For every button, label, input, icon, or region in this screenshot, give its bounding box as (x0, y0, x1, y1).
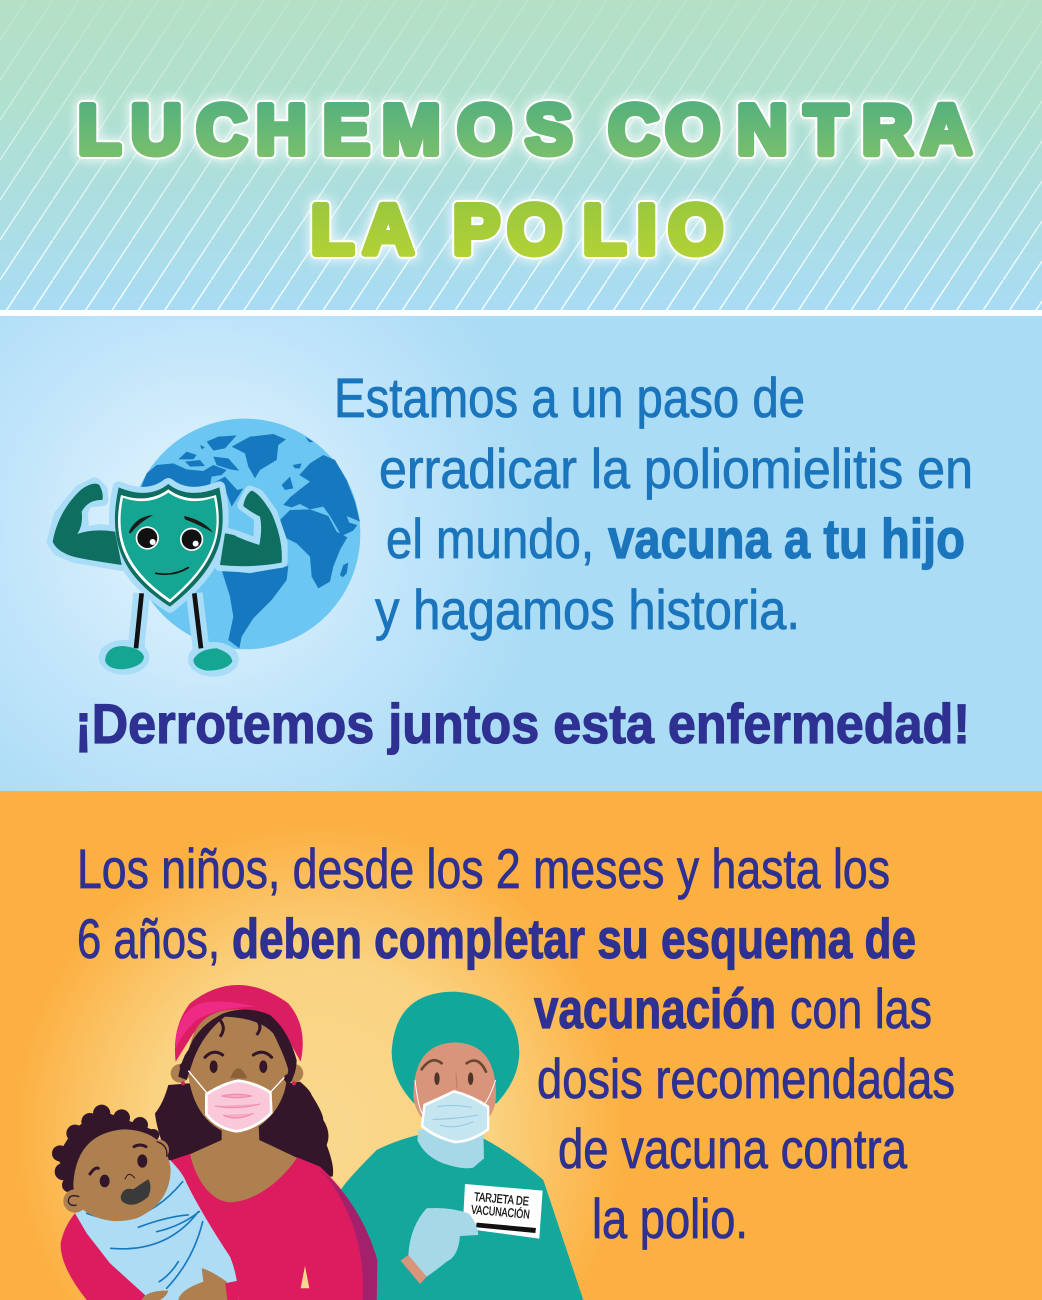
title: LUCHEMOS CONTRA (78, 90, 972, 168)
panel: eradication message (0, 316, 1042, 791)
nurse collar (417, 1130, 484, 1168)
mother hands (142, 1268, 238, 1300)
icon: mascot arms (53, 484, 282, 566)
vaccination card: VACUNACIÓN (471, 1202, 530, 1222)
gloved hand (401, 1208, 478, 1284)
mother neck and chest (188, 1117, 298, 1203)
text block: eradication message: erradicar la poliomielitis en (379, 437, 973, 500)
illustration: mother and baby (52, 985, 377, 1300)
vaccination card: TARJETA DE (473, 1190, 529, 1208)
heading: call to action: ¡Derrotemos juntos esta enfermedad! (75, 692, 970, 755)
mother head (171, 1009, 303, 1137)
title: LA POLIO (311, 190, 723, 268)
baby head (52, 1105, 171, 1221)
title: LA POLIO (311, 190, 723, 268)
title: LUCHEMOS CONTRA (78, 90, 972, 168)
text block: eradication message: el mundo, (386, 507, 594, 570)
icon: mascot legs (136, 593, 201, 648)
text block: vaccination schedule (77, 837, 955, 1250)
nurse gown (330, 1135, 583, 1300)
title (78, 90, 972, 268)
text block: vaccination schedule: vacunación (534, 977, 776, 1040)
vaccination card (463, 1184, 543, 1239)
nurse cap (392, 992, 519, 1103)
mother headband (175, 985, 303, 1062)
text block: eradication message: y hagamos historia. (375, 578, 800, 641)
text block: vaccination schedule: dosis recomendadas (537, 1047, 955, 1110)
baby blanket (75, 1160, 238, 1300)
text block: vaccination schedule: 6 años, (77, 907, 220, 970)
text block: vaccination schedule: la polio. (592, 1187, 748, 1250)
nurse face (413, 1042, 496, 1143)
vaccination needle detail (301, 1266, 309, 1288)
icon: globe and shield mascot (53, 419, 360, 671)
illustration: nurse (330, 992, 583, 1300)
mother body (61, 1154, 377, 1300)
mother hair back (155, 1082, 333, 1177)
text block: vaccination schedule: de vacuna contra (558, 1117, 908, 1180)
icon: shield (115, 484, 223, 607)
title: LA POLIO (311, 190, 723, 268)
icon: mascot halo (53, 483, 282, 671)
text block: eradication message: Estamos a un paso de (334, 366, 805, 429)
icon: globe (130, 419, 360, 649)
panel: vaccination schedule (0, 791, 1042, 1300)
mother sleeve edge (317, 1167, 377, 1300)
panel: title header (0, 0, 1042, 310)
text block: eradication message: vacuna a tu hijo (608, 507, 965, 570)
title: LUCHEMOS CONTRA (78, 90, 972, 168)
text block: eradication message (334, 366, 973, 641)
text block: vaccination schedule: con las (790, 977, 932, 1040)
icon: mascot feet (105, 646, 232, 671)
